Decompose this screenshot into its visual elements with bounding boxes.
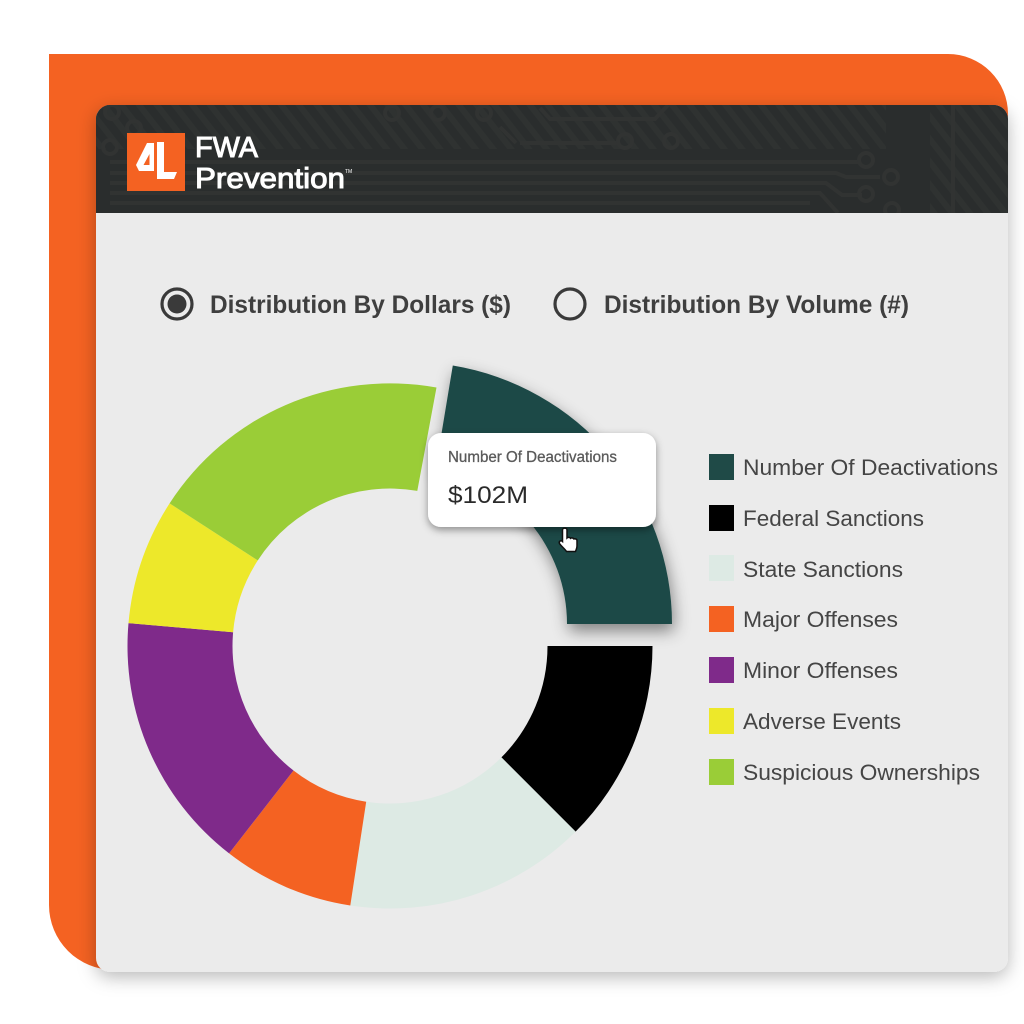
tooltip: $102M xyxy=(448,482,528,509)
logo: 4L FWA Prevention: FWA xyxy=(195,132,259,164)
radio: distribution by dollars (selected): Distribution By Dollars ($) xyxy=(210,291,511,319)
legend item: adverse events: Adverse Events xyxy=(743,709,901,734)
tooltip xyxy=(428,433,656,527)
icon: hand cursor xyxy=(559,528,577,552)
logo: 4L FWA Prevention: Prevention xyxy=(195,163,345,195)
legend item: federal sanctions: Federal Sanctions xyxy=(743,506,924,531)
radio: distribution by volume: Distribution By Volume (#) xyxy=(604,291,909,319)
segment: number of deactivations (exploded) xyxy=(436,366,672,624)
segment: federal sanctions xyxy=(501,646,652,832)
tooltip: Number Of Deactivations xyxy=(448,449,617,466)
legend item: suspicious ownerships: Suspicious Ownerships xyxy=(743,760,980,785)
segment: minor offenses xyxy=(127,623,294,853)
logo: 4L FWA Prevention xyxy=(127,132,352,195)
segment: major offenses xyxy=(229,770,366,906)
segment: state sanctions xyxy=(350,757,576,909)
legend item: number of deactivations: Number Of Deactivations xyxy=(743,455,998,480)
header bar xyxy=(96,105,1008,217)
segment: suspicious ownerships xyxy=(170,383,436,560)
logo: 4L FWA Prevention: TM xyxy=(345,169,352,175)
legend item: minor offenses: Minor Offenses xyxy=(743,658,898,683)
segment: adverse events xyxy=(128,503,258,632)
legend xyxy=(709,454,998,785)
donut chart xyxy=(127,366,672,909)
legend item: major offenses: Major Offenses xyxy=(743,607,898,632)
legend item: state sanctions: State Sanctions xyxy=(743,557,903,582)
dashboard card xyxy=(96,105,1008,972)
